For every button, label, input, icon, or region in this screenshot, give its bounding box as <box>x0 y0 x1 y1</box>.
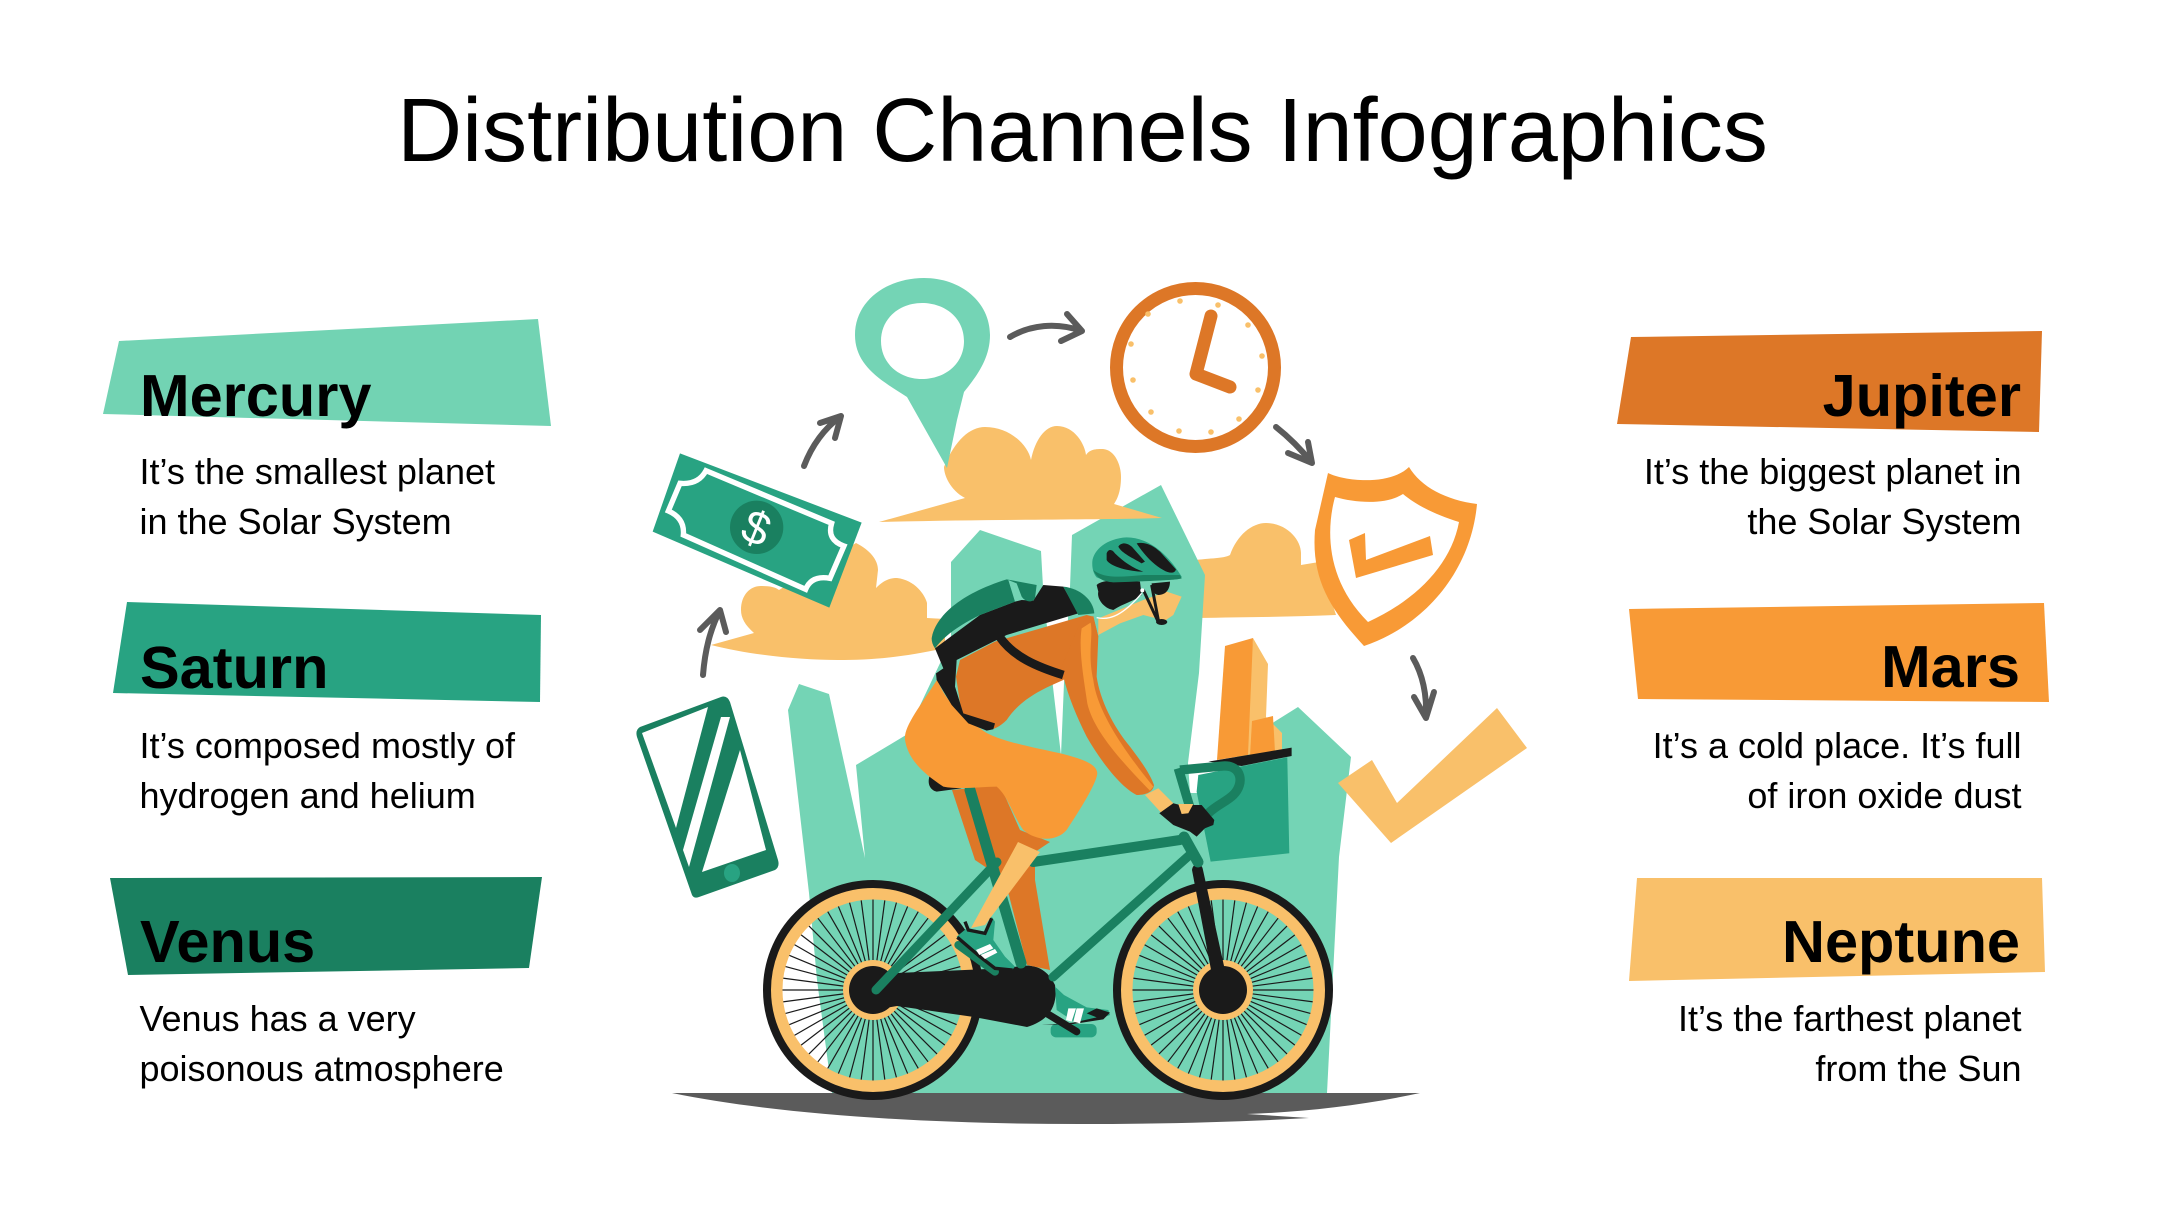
arm stripe <box>1081 623 1153 791</box>
clock <box>1116 288 1274 446</box>
text: Jupiter description: the Solar System <box>1747 501 2022 542</box>
banner: Mars <box>1629 603 2049 702</box>
backpack <box>932 579 1094 731</box>
banner: Mercury <box>103 319 551 426</box>
text: Venus description: poisonous atmosphere <box>140 1048 504 1089</box>
panel: Venus <box>110 877 542 1089</box>
shield <box>1314 467 1477 646</box>
text: Mars description: It’s a cold place. It’s full <box>1653 725 2022 766</box>
helmet <box>1092 537 1182 582</box>
chain guard <box>873 966 1056 1027</box>
illustration: cyclist scene <box>636 278 1527 1124</box>
earphone <box>1097 593 1142 618</box>
banner: Jupiter <box>1617 331 2042 432</box>
cloud: left <box>711 543 945 660</box>
heading: Jupiter: Jupiter <box>1823 362 2021 429</box>
thigh <box>905 679 1097 839</box>
banner: Neptune <box>1629 878 2045 981</box>
rear wheel <box>767 884 979 1096</box>
arrow: shield to check <box>1413 658 1434 718</box>
panel: Neptune <box>1629 878 2045 1089</box>
heading: Mercury: Mercury <box>140 362 372 429</box>
tower <box>1217 638 1282 760</box>
front wheel <box>1117 884 1329 1096</box>
heading: Mars: Mars <box>1881 633 2020 700</box>
checkmark <box>1338 708 1527 843</box>
cloud: right <box>1195 523 1336 618</box>
banner: Saturn <box>113 602 541 702</box>
panel: Mercury <box>103 319 551 542</box>
cyclist back leg <box>952 785 1050 970</box>
text: Mercury description: in the Solar System <box>140 501 452 542</box>
hair <box>1097 581 1142 610</box>
arrow: clock to shield <box>1276 427 1312 463</box>
map pin <box>855 278 990 468</box>
arrow: phone to money <box>700 610 726 675</box>
neck and face <box>1098 592 1182 635</box>
arrow: money to pin <box>804 416 841 466</box>
sunglasses <box>1152 582 1170 595</box>
glove <box>1159 803 1214 837</box>
arm sleeve <box>1062 616 1154 795</box>
basket and handlebar <box>1178 748 1292 862</box>
heading: Venus: Venus <box>140 908 315 975</box>
bicycle <box>767 864 1329 1096</box>
panel: Saturn <box>113 602 541 816</box>
money bill <box>653 453 862 608</box>
phone <box>636 697 779 898</box>
text: Mercury description: It’s the smallest planet <box>140 451 495 492</box>
heading: Neptune: Neptune <box>1782 908 2020 975</box>
fork <box>1192 864 1226 975</box>
text: Saturn description: It’s composed mostly of <box>140 725 516 766</box>
front leg <box>971 842 1040 928</box>
forearm <box>1145 788 1173 813</box>
helmet strap <box>1143 585 1158 621</box>
cyclist <box>905 537 1214 839</box>
saddle <box>929 775 962 792</box>
panel: Jupiter <box>1617 331 2042 542</box>
bicycle frame <box>876 790 1198 990</box>
text: Neptune description: from the Sun <box>1815 1048 2022 1089</box>
text: Saturn description: hydrogen and helium <box>140 775 476 816</box>
cloud: top <box>879 426 1162 522</box>
text: Mars description: of iron oxide dust <box>1747 775 2022 816</box>
heading: Saturn: Saturn <box>140 634 328 701</box>
text: Jupiter description: It’s the biggest planet in <box>1644 451 2022 492</box>
banner: Venus <box>110 877 542 975</box>
torso <box>956 615 1098 730</box>
ground shadow <box>672 1093 1420 1124</box>
lower shoe and pedal <box>1042 987 1110 1037</box>
upper shoe <box>957 917 1015 972</box>
money bill: $ <box>735 499 778 557</box>
text: Venus description: Venus has a very <box>140 998 416 1039</box>
title: Distribution Channels Infographics <box>397 81 1768 181</box>
text: Neptune description: It’s the farthest planet <box>1678 998 2022 1039</box>
panel: Mars <box>1629 603 2049 816</box>
arrow: pin to clock <box>1010 314 1082 341</box>
city buildings backdrop <box>788 485 1351 1093</box>
